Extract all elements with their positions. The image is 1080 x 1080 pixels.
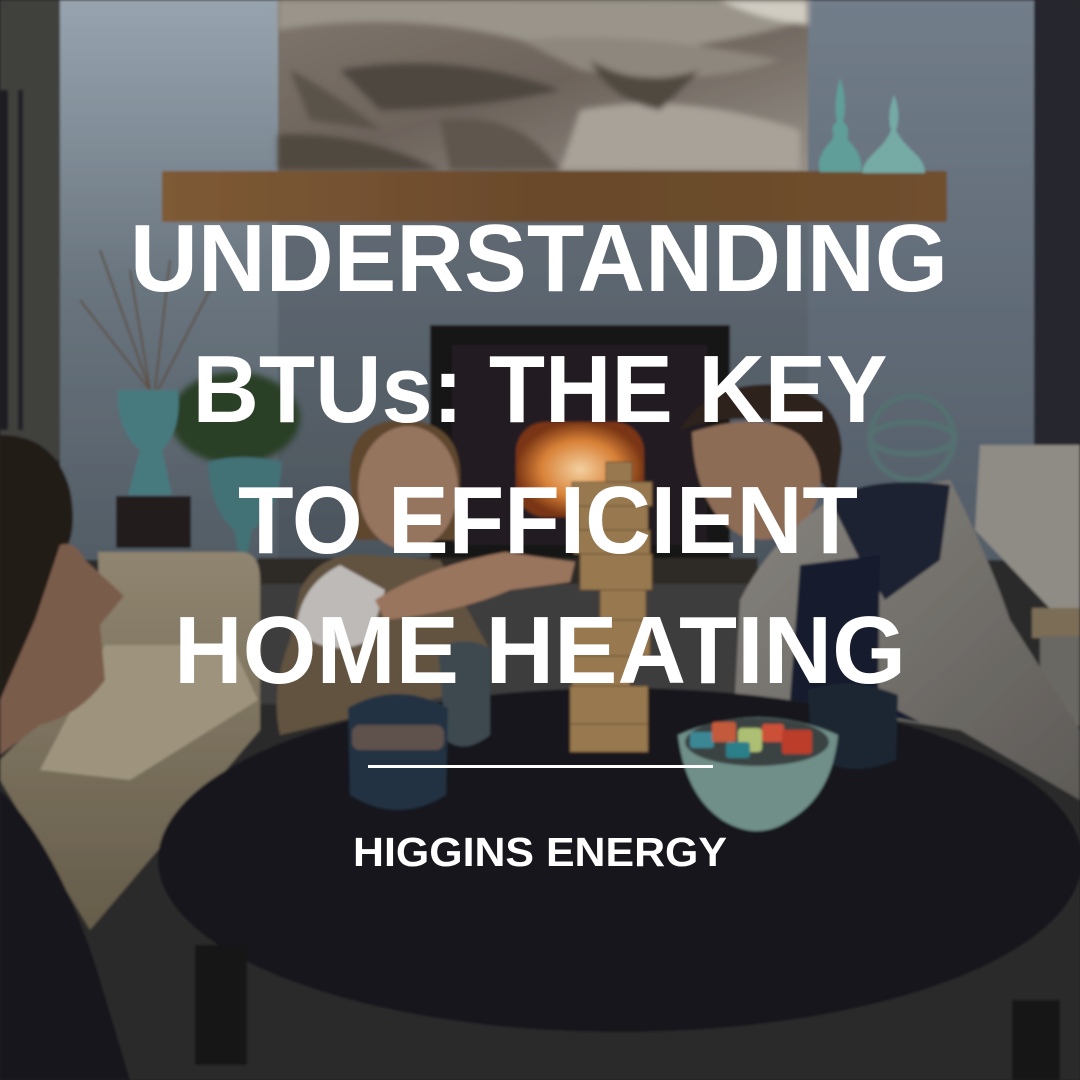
armillary sphere decoration <box>870 396 954 480</box>
title <box>130 205 948 704</box>
woman in foreground <box>0 435 130 1080</box>
left plant and vases <box>80 250 300 552</box>
painting <box>278 0 808 172</box>
title: UNDERSTANDING <box>130 205 948 312</box>
round table <box>158 688 1080 1080</box>
brand name: HIGGINS ENERGY <box>353 829 727 875</box>
fireplace <box>258 325 758 584</box>
glasses on table <box>348 642 898 810</box>
title: TO EFFICIENT <box>238 467 858 574</box>
right armchair <box>975 445 1080 726</box>
title: HOME HEATING <box>174 597 906 704</box>
mantel shelf <box>162 171 947 222</box>
title: BTUs: THE KEY <box>192 336 888 443</box>
block tower <box>570 462 652 752</box>
left sofa <box>0 552 260 930</box>
divider line <box>368 765 713 768</box>
girl <box>277 420 575 735</box>
teal vases on mantel <box>819 78 925 173</box>
boy <box>680 385 1080 800</box>
candy bowl <box>678 718 838 831</box>
